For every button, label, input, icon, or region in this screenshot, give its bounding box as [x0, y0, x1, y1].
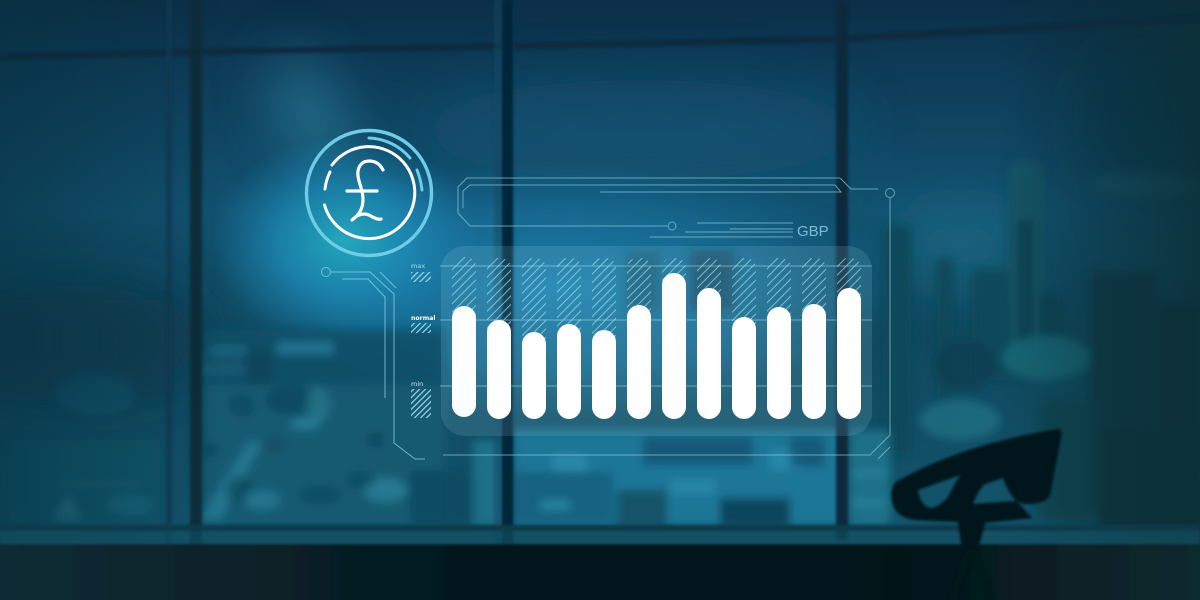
icon: pound sterling coin	[306, 130, 432, 256]
floor	[0, 544, 1200, 600]
icon: upper right arc	[369, 138, 410, 158]
icon: pound sign	[347, 161, 383, 220]
hatched maximum bars	[452, 257, 861, 348]
legend: max: max	[411, 262, 425, 270]
sky clouds	[0, 40, 1200, 395]
mid city blocks	[0, 300, 890, 526]
gridlines max normal min	[440, 266, 872, 386]
legend	[411, 262, 435, 418]
left foreground	[0, 300, 165, 400]
horizon glow	[210, 160, 910, 420]
legend: max	[411, 262, 431, 282]
label: GBP: GBP	[797, 223, 829, 240]
icon: coin outer ring	[306, 130, 432, 256]
legend: normal: normal	[411, 315, 435, 322]
tech frame around chart	[443, 178, 894, 459]
legend: normal	[411, 315, 435, 333]
chart panel	[441, 246, 872, 436]
icon: left dash of inner ring	[325, 172, 330, 189]
icon: right arc	[417, 170, 422, 190]
chair silhouette	[892, 429, 1062, 600]
legend: min	[411, 380, 431, 418]
white value bars	[452, 273, 861, 419]
skyline right	[625, 160, 1200, 530]
icon: coin inner ring	[324, 147, 415, 239]
bar chart	[440, 257, 872, 419]
legend: min: min	[411, 380, 423, 388]
connector lines from coin to chart	[322, 268, 425, 459]
